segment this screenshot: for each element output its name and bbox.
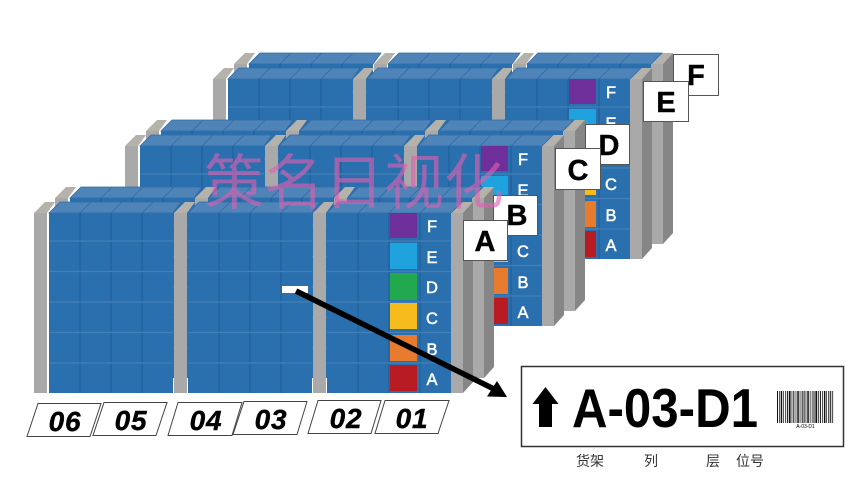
rack E: A [605, 237, 617, 255]
column 04 [168, 402, 242, 436]
column 01 [375, 400, 449, 434]
label box A: A [475, 226, 496, 258]
column 05 [93, 402, 167, 436]
label box D: D [599, 130, 619, 162]
arrow to location card [296, 291, 507, 397]
label box A [464, 220, 508, 260]
barcode: A-03-D1 [796, 424, 815, 430]
watermark: 策名日视化 [204, 135, 504, 222]
rack D [146, 120, 585, 311]
column 02 [308, 400, 381, 434]
rack C [125, 135, 564, 326]
caption: 列: 列 [644, 451, 658, 471]
rack E: B [605, 207, 617, 225]
selected slot marker [282, 286, 308, 293]
caption: 货架: 货架 [576, 451, 604, 471]
label box D [586, 124, 630, 164]
location card [522, 366, 844, 446]
rack E: F [606, 84, 616, 102]
rack C: E [517, 182, 529, 200]
label box F: F [687, 60, 705, 92]
label box F [674, 54, 718, 96]
column 03 [233, 402, 307, 435]
rack C: B [517, 274, 529, 292]
column 04: 04 [190, 405, 222, 436]
rack A: B [426, 341, 438, 359]
rack A: A [426, 371, 438, 389]
column 01: 01 [396, 403, 428, 434]
label box C [556, 148, 600, 190]
label box C: C [568, 155, 589, 187]
rack A: F [427, 218, 437, 236]
label box B [494, 196, 538, 236]
label box B: B [507, 200, 527, 232]
column 03: 03 [255, 404, 287, 435]
caption: 层: 层 [706, 451, 720, 471]
rack A: E [426, 249, 438, 267]
column 02: 02 [330, 403, 362, 434]
column 05: 05 [115, 405, 147, 436]
barcode [777, 407, 834, 430]
rack B [55, 187, 494, 378]
label box E: E [656, 87, 676, 119]
column labels [27, 400, 449, 437]
rack F [234, 53, 673, 244]
column 06 [27, 404, 101, 437]
rack C: C [517, 243, 529, 261]
rack A: C [426, 310, 438, 328]
rack E: C [605, 176, 617, 194]
rack E: D [605, 145, 617, 163]
caption: 位号: 位号 [736, 451, 764, 471]
column 06: 06 [49, 406, 81, 437]
rack C: D [517, 212, 529, 230]
rack E [213, 68, 652, 259]
rack C: A [517, 304, 529, 322]
icon: up arrow [532, 387, 558, 427]
rack A: D [426, 279, 438, 297]
rack E: E [605, 115, 617, 133]
label box E [644, 82, 688, 122]
rack C: F [518, 151, 528, 169]
rack A [34, 202, 473, 393]
location code: A-03-D1 [572, 377, 758, 439]
